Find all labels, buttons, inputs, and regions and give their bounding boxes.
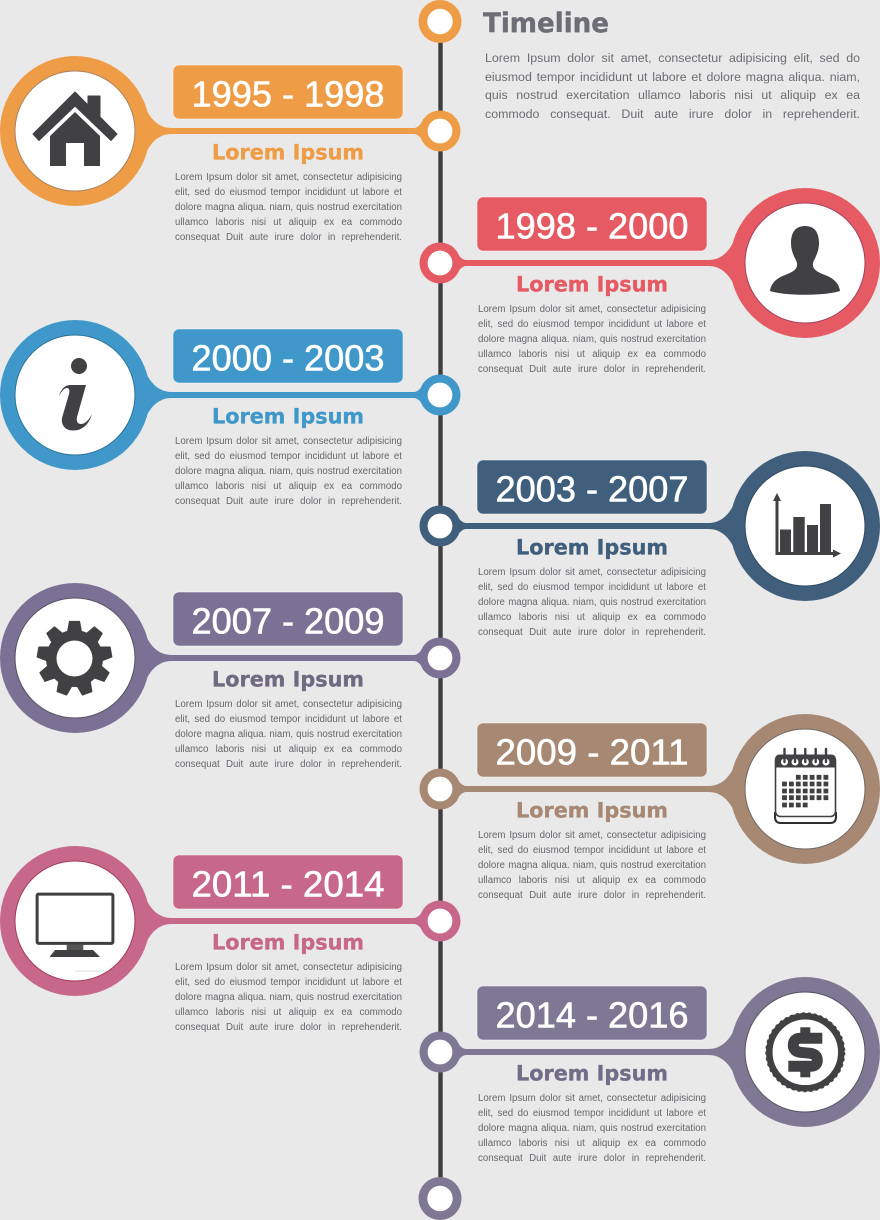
text block: description: dolore magna aliqua. niam, quis nostrud exercitation — [175, 202, 402, 213]
icon: calendar — [775, 749, 836, 823]
text block: description: elit, sed do eiusmod tempor incididunt ut labore et — [478, 318, 706, 330]
text block: description: consequat Duit aute irure dolor in reprehenderit. — [478, 364, 706, 374]
graphic: circle, connector and badge: 1995 - 1998 — [192, 74, 384, 114]
text block: intro paragraph — [485, 51, 860, 121]
graphic: circle, connector and badge: 2007 - 2009 — [192, 600, 384, 641]
graphic: circle, connector and badge: 2003 - 2007 — [496, 468, 688, 510]
text block: description: elit, sed do eiusmod tempor incididunt ut labore et — [175, 450, 402, 462]
text block: description: Lorem Ipsum dolor sit amet, consectetur adipisicing — [175, 172, 402, 183]
text block: description: dolore magna aliqua. niam, quis nostrud exercitation — [175, 728, 402, 740]
text block: description: consequat Duit aute irure dolor in reprehenderit. — [478, 627, 706, 638]
graphic: circle, connector and badge: Lorem Ipsum — [212, 404, 364, 428]
text block: description: dolore magna aliqua. niam, quis nostrud exercitation — [478, 860, 706, 871]
text block: description — [175, 698, 402, 770]
text block: description: Lorem Ipsum dolor sit amet, consectetur adipisicing — [175, 962, 402, 972]
text block: description: elit, sed do eiusmod tempor incididunt ut labore et — [175, 187, 402, 198]
text block: description: ullamco laboris nisi ut aliquip ex ea commodo — [478, 1138, 706, 1149]
text block: description: dolore magna aliqua. niam, quis nostrud exercitation — [175, 466, 402, 476]
node: bottom end marker — [418, 1177, 462, 1220]
icon: bar chart — [773, 493, 841, 558]
text block: description: Lorem Ipsum dolor sit amet, consectetur adipisicing — [478, 1093, 706, 1104]
graphic: circle, connector and badge: 2011 - 2014 — [192, 863, 384, 904]
text block: description — [175, 962, 402, 1032]
graphic: circle, connector and badge: Lorem Ipsum — [516, 536, 668, 560]
text block: description — [478, 830, 706, 901]
text block: description: elit, sed do eiusmod tempor incididunt ut labore et — [175, 976, 402, 988]
graphic: circle, connector and badge — [420, 977, 880, 1127]
text block: description: consequat Duit aute irure dolor in reprehenderit. — [478, 1153, 706, 1164]
text block: description: consequat Duit aute irure dolor in reprehenderit. — [478, 890, 706, 901]
text block: description: consequat Duit aute irure dolor in reprehenderit. — [175, 1022, 402, 1032]
text block: description: Lorem Ipsum dolor sit amet, consectetur adipisicing — [175, 698, 402, 710]
text block: description: Lorem Ipsum dolor sit amet, consectetur adipisicing — [175, 436, 402, 446]
graphic: circle, connector and badge: 1998 - 2000 — [496, 205, 688, 246]
text block: description: consequat Duit aute irure dolor in reprehenderit. — [175, 496, 402, 506]
text block: intro paragraph: quis nostrud exercitation ullamco laboris nisi ut aliquip ex ea — [485, 88, 860, 102]
heading: Timeline: Timeline — [483, 8, 609, 39]
text block: description: dolore magna aliqua. niam, quis nostrud exercitation — [478, 1123, 706, 1134]
graphic: circle, connector and badge: 2000 - 2003 — [192, 337, 384, 378]
graphic: circle, connector and badge: Lorem Ipsum — [212, 667, 364, 691]
graphic: circle, connector and badge: Lorem Ipsum — [516, 1062, 668, 1086]
text block: description: elit, sed do eiusmod tempor incididunt ut labore et — [478, 582, 706, 593]
text block: description — [478, 567, 706, 638]
icon: house — [33, 92, 117, 166]
text block: intro paragraph: commodo consequat. Duit aute irure dolor in reprehenderit. — [485, 107, 860, 121]
text block: description: Lorem Ipsum dolor sit amet, consectetur adipisicing — [478, 830, 706, 841]
text block: description — [175, 436, 402, 506]
icon: info — [58, 358, 92, 430]
text block: description: ullamco laboris nisi ut aliquip ex ea commodo — [175, 1006, 402, 1018]
graphic: circle, connector and badge: Lorem Ipsum — [212, 140, 364, 164]
text block: intro paragraph: Lorem Ipsum dolor sit amet, consectetur adipisicing elit, sed do — [485, 51, 860, 65]
graphic: circle, connector and badge: 2014 - 2016 — [496, 994, 688, 1036]
text block: description: Lorem Ipsum dolor sit amet, consectetur adipisicing — [478, 304, 706, 314]
text block: description: Lorem Ipsum dolor sit amet, consectetur adipisicing — [478, 567, 706, 578]
graphic: circle, connector and badge — [0, 320, 460, 470]
panel: 2011 - 2014 — [0, 846, 460, 1032]
text block: description — [478, 304, 706, 374]
text block: description: ullamco laboris nisi ut aliquip ex ea commodo — [478, 612, 706, 623]
panel: 2009 - 2011 — [420, 714, 880, 901]
text block: description: elit, sed do eiusmod tempor incididunt ut labore et — [478, 1108, 706, 1119]
text block: description: consequat Duit aute irure dolor in reprehenderit. — [175, 232, 402, 243]
text block: description: dolore magna aliqua. niam, quis nostrud exercitation — [175, 992, 402, 1002]
text block: description: ullamco laboris nisi ut aliquip ex ea commodo — [175, 744, 402, 754]
graphic: circle, connector and badge — [0, 56, 460, 206]
graphic: circle, connector and badge: 2009 - 2011 — [496, 732, 688, 772]
text block: intro paragraph: eiusmod tempor incididunt ut labore et dolore magna aliqua. niam, — [485, 70, 860, 84]
icon: dollar seal — [766, 1013, 844, 1091]
graphic: circle, connector and badge: Lorem Ipsum — [212, 930, 364, 954]
panel: 2000 - 2003 — [0, 320, 460, 506]
text block: description — [175, 172, 402, 243]
graphic: circle, connector and badge — [0, 846, 460, 996]
graphic: circle, connector and badge — [420, 451, 880, 601]
icon: monitor — [37, 894, 113, 971]
icon: gear — [37, 621, 112, 695]
text block: description: ullamco laboris nisi ut aliquip ex ea commodo — [478, 875, 706, 886]
graphic: circle, connector and badge — [420, 714, 880, 864]
graphic: circle, connector and badge — [0, 583, 460, 733]
panel: 2003 - 2007 — [420, 451, 880, 638]
text block: description: ullamco laboris nisi ut aliquip ex ea commodo — [175, 480, 402, 492]
text block: description: consequat Duit aute irure dolor in reprehenderit. — [175, 758, 402, 770]
graphic: circle, connector and badge: Lorem Ipsum — [516, 798, 668, 822]
panel: 1998 - 2000 — [420, 188, 880, 374]
panel: 1995 - 1998 — [0, 56, 460, 243]
panel: 2007 - 2009 — [0, 583, 460, 770]
text block: description: dolore magna aliqua. niam, quis nostrud exercitation — [478, 597, 706, 608]
text block: description: elit, sed do eiusmod tempor incididunt ut labore et — [478, 845, 706, 856]
panel: 2014 - 2016 — [420, 977, 880, 1164]
text block: description — [478, 1093, 706, 1164]
text block: description: ullamco laboris nisi ut aliquip ex ea commodo — [478, 348, 706, 360]
text block: description: dolore magna aliqua. niam, quis nostrud exercitation — [478, 334, 706, 344]
node: top start marker — [418, 0, 462, 43]
text block: description: ullamco laboris nisi ut aliquip ex ea commodo — [175, 217, 402, 228]
text block: description: elit, sed do eiusmod tempor incididunt ut labore et — [175, 714, 402, 724]
graphic: circle, connector and badge: Lorem Ipsum — [516, 272, 668, 296]
graphic: circle, connector and badge — [420, 188, 880, 338]
icon: person — [770, 226, 840, 294]
